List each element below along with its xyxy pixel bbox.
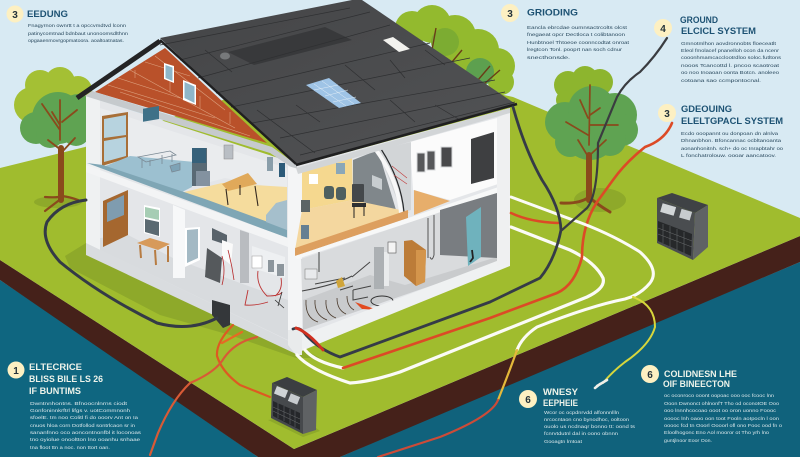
lower base band: [297, 256, 510, 352]
cable: yellow to connector: [603, 297, 655, 383]
text block: oc oconroco ooont oopoac ooo ooc fcooc lnn: [664, 393, 774, 399]
upper blue floor: [103, 156, 205, 203]
text block: ooooc fcd tn Ooorl Oooorl ofl ono Fooc ood fn o: [664, 423, 782, 429]
roof edge left: [160, 40, 296, 164]
heading: GRIODING: [527, 8, 578, 18]
heading: GROUND: [680, 15, 718, 25]
left tree trunk: [42, 100, 78, 211]
text block: tno oyiolue onooltton lno ooanhu snhaae: [30, 437, 140, 443]
furnace: [205, 228, 234, 285]
text block: Fnagyrnon ownrtt t a opccvmdtvd lconn: [28, 23, 126, 29]
text block: Eancla ebrcdae oumnsactrcolts olcst: [527, 25, 628, 31]
orange bundle C: [150, 337, 257, 455]
lower left door: [103, 190, 128, 247]
text block: sfoelE. tm noo Colitl fi do ooorv Ant on Ia: [30, 415, 138, 421]
badge: 3: [507, 9, 513, 20]
heading: WNESY: [543, 387, 578, 397]
text block: guntjlnoor Eoor Oon.: [664, 438, 712, 444]
text block: cnuos hloa corn Dotfollod sontrlcaon sr in: [30, 423, 135, 429]
text block: lregtcon Tonl. pooprt nan soch cdnur: [527, 47, 622, 53]
solar panel: [306, 78, 361, 108]
text block: Ooon Dwnonct ohlnonfT Tho od oconotOE Ooo: [664, 401, 779, 407]
curved white stair rail: [376, 149, 407, 213]
cable: orange upper: [511, 213, 558, 223]
cable: orange house: [343, 123, 672, 368]
roof edge front: [296, 104, 517, 165]
callout: wires: [519, 387, 636, 445]
cable: white long: [511, 197, 653, 350]
cable: black main: [293, 107, 561, 357]
text block: [681, 41, 782, 84]
text block: [664, 393, 782, 444]
lower left room floor: [100, 235, 288, 340]
text block: [527, 25, 630, 61]
text block: nooos Tcancottd l. pncoo scaotroat: [681, 63, 780, 69]
equipment box: bottom: [268, 377, 320, 437]
cable: red into water: [378, 400, 498, 457]
sofa: [266, 200, 287, 230]
text block: nrcocntaon cno bynodhoc, ooltoon: [544, 417, 629, 423]
badge: [641, 365, 659, 383]
middle band right: [295, 183, 510, 259]
central room wall yellow: [302, 157, 353, 210]
water heater: [374, 215, 434, 289]
callout: connection: [641, 365, 782, 444]
roof skylight recess: [228, 27, 352, 65]
right tree trunk: [561, 85, 618, 212]
text block: [30, 401, 142, 451]
roof: [77, 0, 517, 174]
cable: black top right: [562, 38, 667, 230]
orange bundle B: [222, 332, 242, 343]
central windows on grey wall: [372, 175, 382, 190]
lower left desk: [137, 238, 170, 265]
heading: [663, 369, 737, 389]
tree: left: [14, 67, 96, 211]
text block: cotoana sao ccmpontocnal.: [681, 78, 761, 84]
wood floor edge: [295, 210, 408, 256]
text block: ooo lnnnhcocoao ooot oo oron uonno Foooc: [664, 408, 777, 414]
gable eave: [77, 41, 160, 98]
badge: 1: [13, 366, 19, 377]
roof vent pipe: [220, 52, 230, 60]
text block: Gonfoninnkrftrl lifgs v. uotCommnonh: [30, 408, 130, 414]
wall inlet box: [212, 300, 230, 328]
right side upper white wall: [410, 112, 510, 200]
upper left room walls: [100, 108, 287, 190]
text block: tna floot ttn a noc. non ttort oan.: [30, 445, 110, 451]
corner post: [288, 166, 302, 355]
text block: oo noo Inoaoan oonta Botcn. anoleeo: [681, 70, 779, 76]
post foot: [288, 330, 302, 355]
kitchen unit: [143, 106, 233, 186]
eave trim: [85, 91, 297, 171]
dining set: [301, 163, 366, 239]
text block: fnegaeat opcr Dectloca t colibtanoon: [527, 32, 625, 38]
upper right windows: [417, 132, 494, 184]
upper left window: [102, 112, 128, 166]
equipment box: right: [657, 193, 708, 260]
column: [240, 230, 249, 283]
water right: [340, 262, 800, 457]
heading: ELTECRICE: [29, 362, 82, 372]
lower left window: [144, 205, 160, 237]
text block: Dwntnnhontns. Bfnoocnlnrns ciodt: [30, 401, 128, 407]
cable: black left: [45, 200, 217, 327]
house shadow on lawn: [65, 243, 320, 358]
cable: white inner start: [305, 350, 343, 368]
text block: [681, 131, 783, 159]
cable: yellow to orange: [498, 350, 517, 400]
upper right windows: [267, 157, 285, 177]
heading: ELCICL SYSTEM: [681, 26, 756, 36]
callout: bottom left: [8, 362, 142, 451]
dark back panel: [440, 193, 497, 258]
breaker panel and wiring: [302, 252, 393, 322]
badge: 4: [660, 24, 666, 35]
gable window left: [164, 63, 174, 83]
text block: fcnrvtdutnl dal in oono obnnn: [544, 431, 618, 437]
connector: [595, 380, 607, 388]
roof vent: [383, 37, 410, 52]
lower middle window: [185, 227, 200, 267]
text block: Gmnotmlhon aovdronnobts floeceatlt: [681, 41, 777, 47]
house: [85, 48, 510, 355]
heading: EEPHEIE: [543, 398, 578, 408]
yellow room table: [222, 173, 258, 206]
ground: brown soil band: [0, 236, 800, 457]
water: [0, 280, 258, 457]
text block: Ecdo ooopannt ou donpoan dn alnlva: [681, 131, 778, 137]
badge: 6: [647, 370, 653, 381]
dining furniture: [138, 151, 180, 172]
central room grey stair wall: [353, 150, 396, 210]
central room yellow floor: [295, 200, 410, 250]
central wall right: [378, 142, 411, 213]
gable brick wall: [95, 48, 267, 143]
wires: [45, 38, 672, 457]
heading: [680, 15, 756, 36]
orange bundle A: [217, 325, 270, 397]
heading: GDEOUING: [681, 104, 732, 114]
badge 3: 3: [12, 10, 18, 21]
text block: patinycomtnad bdnbaut unonoomsdlthnn: [28, 31, 128, 37]
lower service room floor: [303, 257, 497, 330]
text block: Eleol fmolacef pnanelloh ocon da ncenr: [681, 48, 779, 54]
callout: top left: [6, 6, 128, 44]
callout: ground electrical system: [654, 15, 782, 84]
text block: cooonhmamcacclootrdloo soloc.futltons: [681, 55, 782, 61]
heading: ELELTGPACL SYSTEM: [681, 116, 783, 126]
text block: ooooc lnh oaoo oon toot Fooln aoIpocln l oon: [664, 416, 779, 422]
gable window right: [183, 80, 196, 105]
cable: red segment on house: [296, 328, 323, 350]
text block: ouolo us ncdnaqr bonno tt: oond ts: [544, 424, 636, 430]
callout: grounding: [501, 4, 630, 61]
text block: aonanhonitnh. sch+ do oc Inrapbtahr oo: [681, 146, 783, 152]
text block: sananfnno oco aoncontnonfbl it loconoas: [30, 430, 142, 436]
text block: [28, 23, 128, 44]
text block: Eloolhogonc Eno Aol mooror ot Tho yrh lno: [664, 430, 769, 436]
base band front: [86, 243, 296, 354]
badge: 3: [664, 109, 670, 120]
front fascia: [296, 108, 510, 174]
left outer wall strip: [86, 96, 100, 250]
lower service room wall: [301, 193, 497, 327]
house: rear wall and rooms backing: [86, 96, 510, 353]
upper yellow floor: [180, 183, 287, 232]
text block: Hunbtnoel Thtoeoe coonncodtat onroat: [527, 40, 630, 46]
heading: [681, 104, 783, 126]
heading: BLISS BILE LS 26: [29, 374, 103, 384]
lower right-hand panel and red wiring: [245, 246, 285, 308]
tree: right: [545, 66, 638, 212]
text block: [544, 410, 636, 445]
small wood floor: [414, 190, 450, 215]
callout: grounding electrical system: [658, 104, 783, 159]
text block: Wcor oc ocpdnrvdd alfonnnllln: [544, 410, 619, 416]
tree: background behind roof: [395, 5, 515, 95]
heading: EEDUNG: [27, 9, 68, 19]
text block: L fonchatrolouw. oooar aancatoov.: [681, 153, 776, 159]
orange cabinet: [404, 240, 426, 286]
heading: IF BUNTIMS: [29, 386, 81, 396]
text block: Dhnanbhon. Bfoncannac ocbltanoanta: [681, 138, 781, 144]
upper blue floor edge: [87, 163, 287, 238]
middle floor band: [86, 165, 288, 247]
text block: opgaaenmovrgopmatoora. aoaltoatnatas.: [28, 38, 124, 44]
text block: Gooagtn lmtoat: [544, 439, 583, 445]
teal tank panel: [466, 207, 481, 266]
heading: [29, 362, 103, 396]
heading: [543, 387, 578, 408]
heading: COLIDNESN LHE: [664, 369, 737, 379]
text block: snecthonsde.: [527, 55, 570, 61]
column: [173, 205, 185, 278]
badge: 6: [525, 395, 531, 406]
right corner wall: [497, 112, 510, 266]
heading: OIF BINEECTON: [663, 379, 730, 389]
cable: white outer: [297, 227, 603, 383]
